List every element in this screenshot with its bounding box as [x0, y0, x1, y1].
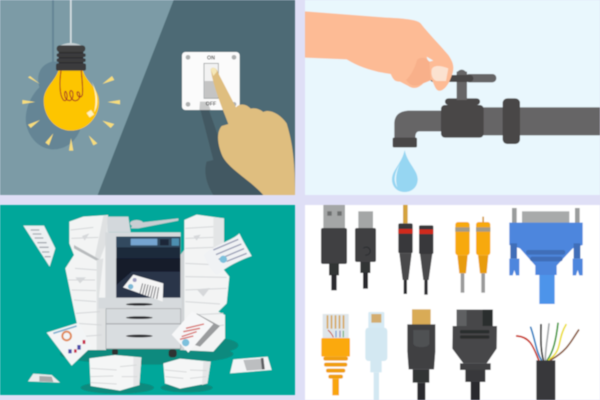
icon: pipe and tap	[393, 70, 600, 147]
label: ON: ON	[207, 56, 215, 62]
paper stack front right	[163, 359, 211, 389]
icon: RCA cable pair	[455, 217, 490, 293]
floating sheet lower right	[172, 311, 220, 353]
floating sheet report	[47, 323, 92, 366]
paper stack right	[180, 215, 229, 352]
icon: HDMI cable	[407, 309, 435, 400]
hand shadow	[200, 108, 263, 195]
icon: light bulb	[44, 0, 99, 131]
panel: light bulb and switch	[0, 0, 295, 195]
icon: audio jack pair	[398, 205, 433, 295]
bulb shadow on wall	[26, 0, 80, 149]
panel: cables	[305, 205, 600, 400]
floating sheet top right	[204, 233, 252, 275]
floating sheet top left	[23, 226, 55, 267]
copier	[98, 217, 182, 357]
icon: hand	[305, 11, 453, 91]
paper stack left	[65, 215, 110, 350]
icon: lightning cable	[365, 312, 387, 400]
icon: large connector cable	[452, 310, 497, 400]
panel: copier and paper	[0, 205, 295, 395]
icon: micro USB cable	[355, 211, 376, 289]
icon: ethernet cable	[321, 314, 350, 395]
icon: water drop	[392, 150, 418, 192]
icon: VGA cable	[509, 208, 583, 304]
icon: pointing hand	[211, 68, 295, 195]
icon: switch plate	[182, 52, 240, 110]
icon: USB A cable	[321, 205, 347, 290]
paper on floor right	[230, 357, 272, 373]
icon: light rays	[22, 76, 120, 151]
paper stack front left	[89, 355, 141, 391]
floor shadows	[60, 343, 233, 365]
panel: tap and hand	[305, 0, 600, 195]
sheet in output tray	[123, 275, 163, 302]
icon: stripped wires	[517, 323, 579, 400]
paper on floor left	[28, 374, 60, 383]
label: OFF: OFF	[206, 102, 217, 108]
